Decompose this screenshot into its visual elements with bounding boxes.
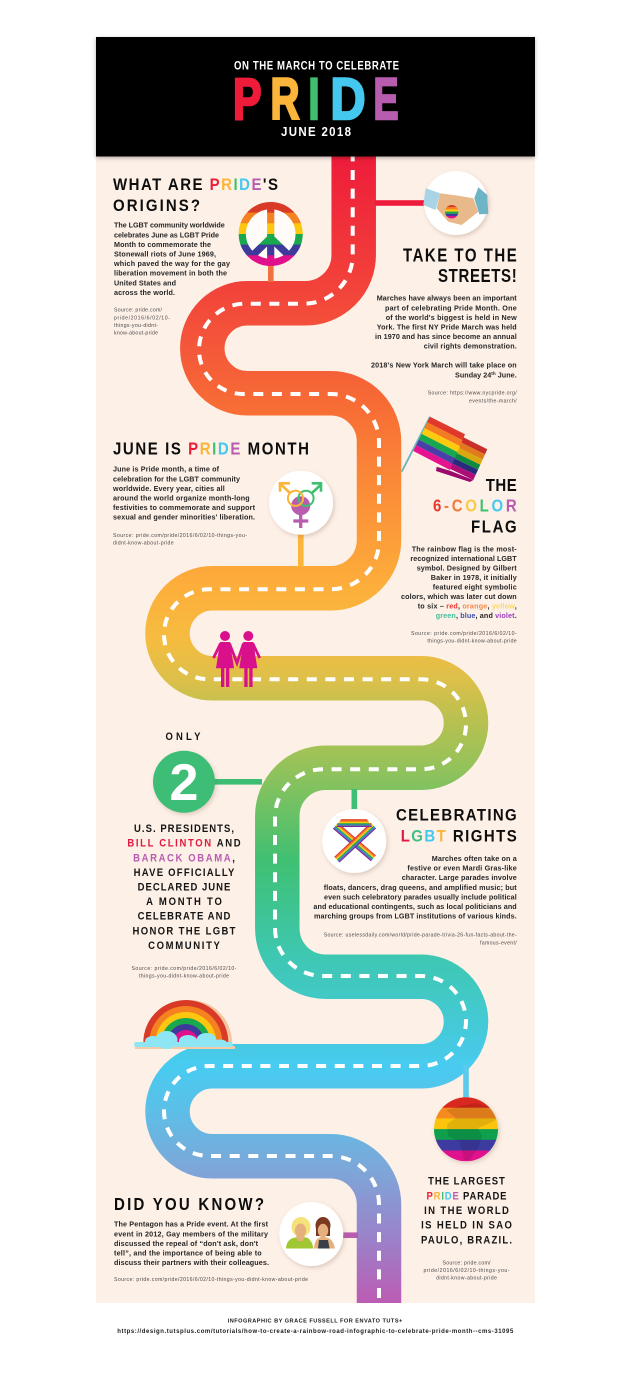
body text: Month to commemorate the [114, 240, 211, 249]
panel: header [96, 37, 535, 156]
presidents statement [127, 823, 241, 952]
source: things-you-didnt-know-about-pride [427, 639, 517, 645]
body text: to six – red, orange, yellow, [418, 602, 517, 610]
source: Source: pride.com/pride/2016/6/02/10-things-you-didnt-know-about-pride [114, 1277, 308, 1283]
body text: part of celebrating Pride Month. One [385, 303, 517, 312]
rainbow road [164, 150, 466, 1303]
heading: 6-COLOR [433, 495, 517, 516]
source [411, 631, 517, 645]
title PRIDE: D [330, 67, 366, 132]
body text: sexual and gender minorities' liberation. [113, 513, 255, 522]
section: largest pride parade [421, 1065, 512, 1282]
heading: JUNE IS PRIDE MONTH [113, 439, 309, 459]
heading: CELEBRATING [396, 807, 517, 825]
body text: The Pentagon has a Pride event. At the first [114, 1220, 269, 1229]
body text: June. [496, 370, 517, 379]
source [132, 966, 237, 980]
connector: road to ribbon [352, 789, 357, 811]
body text [401, 544, 517, 620]
presidents statement: U.S. PRESIDENTS, [134, 823, 234, 835]
heading: TAKE TO THE [403, 245, 517, 266]
presidents statement: CELEBRATE AND [138, 911, 231, 923]
statement: PRIDE PARADE [426, 1191, 507, 1203]
presidents statement: BILL CLINTON AND [127, 838, 241, 850]
body text: 2018's New York March will take place on [371, 361, 517, 370]
heading [403, 245, 517, 286]
section: the 6-color flag [401, 417, 517, 645]
body text: colors, which was later cut down [401, 592, 517, 601]
connector: road to handshake [375, 200, 427, 206]
icon: two women holding hands [214, 631, 260, 687]
icon: handshake [423, 171, 488, 235]
title PRIDE: P [233, 67, 262, 132]
body text: Sunday 24 [455, 370, 491, 379]
icon: rainbow with cloud [134, 1000, 235, 1049]
body text: recognized international LGBT [410, 554, 517, 563]
connector: gender icon to road [298, 534, 304, 567]
statement: IS HELD IN SAO [421, 1220, 512, 1232]
icon: rainbow ribbon [322, 809, 386, 873]
header kicker: ON THE MARCH TO CELEBRATE [234, 60, 399, 73]
presidents statement: DECLARED JUNE [138, 882, 230, 894]
footer credits: https://design.tutsplus.com/tutorials/how-to-create-a-rainbow-road-infographic-to-celebrate-pride-month--cms-31095 [117, 1329, 514, 1335]
section: only 2 presidents [127, 731, 262, 980]
heading: WHAT ARE PRIDE'S [113, 176, 278, 194]
body text: character. Large parades involve [402, 873, 517, 882]
icon: rainbow peace sign [238, 202, 304, 266]
body text: tell”, and the importance of being able to [114, 1248, 262, 1258]
body text: th [491, 371, 496, 376]
connector: road to people icon [343, 1232, 358, 1238]
body text: marching groups from LGBT institutions of various kinds. [314, 912, 517, 921]
body text: featured eight symbolic [433, 583, 517, 592]
section: june is pride month [112, 439, 333, 567]
body text: Marches often take on a [432, 854, 518, 863]
icon: two women portraits [279, 1202, 343, 1266]
heading [396, 807, 517, 846]
body text: festive or even Mardi Gras-like [407, 864, 517, 873]
icon: number 2 badge [153, 751, 215, 813]
body text: symbol. Designed by Gilbert [417, 564, 517, 572]
body text [114, 1220, 269, 1267]
presidents statement: HAVE OFFICIALLY [134, 867, 234, 879]
label: only: ONLY [166, 731, 201, 743]
body text: liberation movement in both the [114, 269, 227, 278]
body text: The rainbow flag is the most- [412, 544, 517, 553]
source: Source: uselessdaily.com/world/pride-parade-trivia-26-fun-facts-about-the- [324, 933, 517, 939]
heading: FLAG [471, 516, 517, 537]
body text: even such celebratory parades usually include political [324, 892, 517, 901]
body text: event in 2012, Gay members of the military [114, 1229, 268, 1238]
connector: road to globe [463, 1065, 469, 1099]
source: Source: pride.com/pride/2016/6/02/10- [411, 631, 517, 637]
presidents statement: HONOR THE LGBT [132, 926, 236, 938]
heading [433, 475, 517, 537]
statement: IN THE WORLD [424, 1205, 509, 1217]
heading [113, 176, 278, 215]
presidents statement: A MONTH TO [146, 896, 222, 908]
title PRIDE [233, 67, 398, 132]
statement [421, 1176, 512, 1247]
body text [313, 854, 518, 921]
statement: PAULO, BRAZIL. [421, 1235, 512, 1247]
body text: discussed the repeal of “don't ask, don't [114, 1239, 259, 1248]
source [113, 533, 247, 547]
body text: worldwide. Every year, cities all [112, 484, 225, 493]
body text: green, blue, and violet. [436, 611, 517, 620]
body text: of the world's biggest is held in New [386, 313, 517, 322]
heading: ORIGINS? [113, 197, 200, 215]
source: things-you-didnt- [114, 323, 158, 329]
body text [113, 221, 230, 297]
body text: Marches have always been an important [377, 294, 517, 303]
body text: The LGBT community worldwide [114, 221, 225, 230]
body text: United States and [114, 278, 176, 287]
body text: across the world. [114, 288, 175, 297]
body text: which paved the way for the gay [113, 259, 230, 268]
body text [112, 465, 256, 522]
source: Source: https://www.nycpride.org/ [428, 391, 517, 397]
icon: rainbow flag [402, 417, 487, 482]
connector: peace to road [268, 264, 274, 282]
body text: celebration for the LGBT community [113, 474, 240, 483]
presidents statement: BARACK OBAMA, [133, 853, 235, 865]
body text: in 1970 and has since become an annual [375, 332, 517, 341]
icon: gender symbols [269, 471, 333, 535]
heading: THE [486, 475, 517, 495]
body text: York. The first NY Pride March was held [377, 322, 517, 332]
source: didnt-know-about-pride [436, 1276, 497, 1282]
presidents statement: COMMUNITY [148, 941, 220, 952]
footer credits [117, 1319, 514, 1335]
source: know-about-pride [114, 331, 158, 337]
connector: 2 to road [212, 779, 262, 785]
source: Source: pride.com/pride/2016/6/02/10-things-you- [113, 533, 247, 539]
source [324, 933, 517, 946]
source: didnt-know-about-pride [113, 541, 174, 547]
section: take to the streets [371, 171, 517, 404]
body text: and educational contingents, such as local politicians and [313, 902, 517, 911]
heading: DID YOU KNOW? [114, 1195, 264, 1214]
source [114, 308, 170, 337]
source: things-you-didnt-know-about-pride [139, 974, 229, 980]
title PRIDE: R [270, 67, 300, 132]
source: Source: pride.com/ [114, 308, 163, 314]
source: pride/2016/6/02/10-things-you- [424, 1268, 510, 1274]
body text: Stonewall riots of June 1969, [114, 250, 216, 258]
body text: June is Pride month, a time of [113, 465, 220, 474]
title PRIDE: I [308, 67, 320, 132]
heading: STREETS! [438, 266, 517, 286]
body text [371, 294, 517, 379]
header date: JUNE 2018 [281, 124, 351, 139]
body text: celebrates June as LGBT Pride [114, 230, 219, 239]
title PRIDE: E [374, 67, 398, 132]
body text: Baker in 1978, it initially [431, 573, 517, 582]
body text: civil rights demonstration. [424, 342, 517, 351]
body text: floats, dancers, drag queens, and amplified music; but [324, 883, 517, 892]
heading: LGBT RIGHTS [401, 828, 517, 846]
source: Source: pride.com/ [442, 1260, 491, 1266]
footer credits: INFOGRAPHIC BY GRACE FUSSELL FOR ENVATO TUTS+ [228, 1319, 403, 1325]
icon: rainbow globe [434, 1097, 500, 1162]
statement: THE LARGEST [428, 1176, 505, 1188]
road centre dashes [164, 151, 466, 1303]
source [428, 391, 517, 404]
panel: cream background [96, 156, 535, 1303]
section: did you know [114, 1195, 358, 1283]
source: Source: pride.com/pride/2016/6/02/10- [132, 966, 237, 972]
infographic canvas [94, 36, 538, 1334]
source [424, 1260, 510, 1282]
source: pride/2016/6/02/10- [114, 315, 170, 321]
body text: discuss their partners with their colleagues. [114, 1258, 269, 1267]
source: events/the-march/ [469, 398, 517, 404]
icon: number 2 badge: 2 [170, 754, 198, 812]
road surface [168, 150, 466, 1303]
section: celebrating lgbt rights [313, 789, 518, 946]
source: famous-event/ [480, 940, 517, 946]
body text: festivities to commemorate and support [113, 503, 256, 512]
section: what are pride's origins [113, 176, 304, 337]
body text: around the world organize month-long [113, 494, 250, 502]
